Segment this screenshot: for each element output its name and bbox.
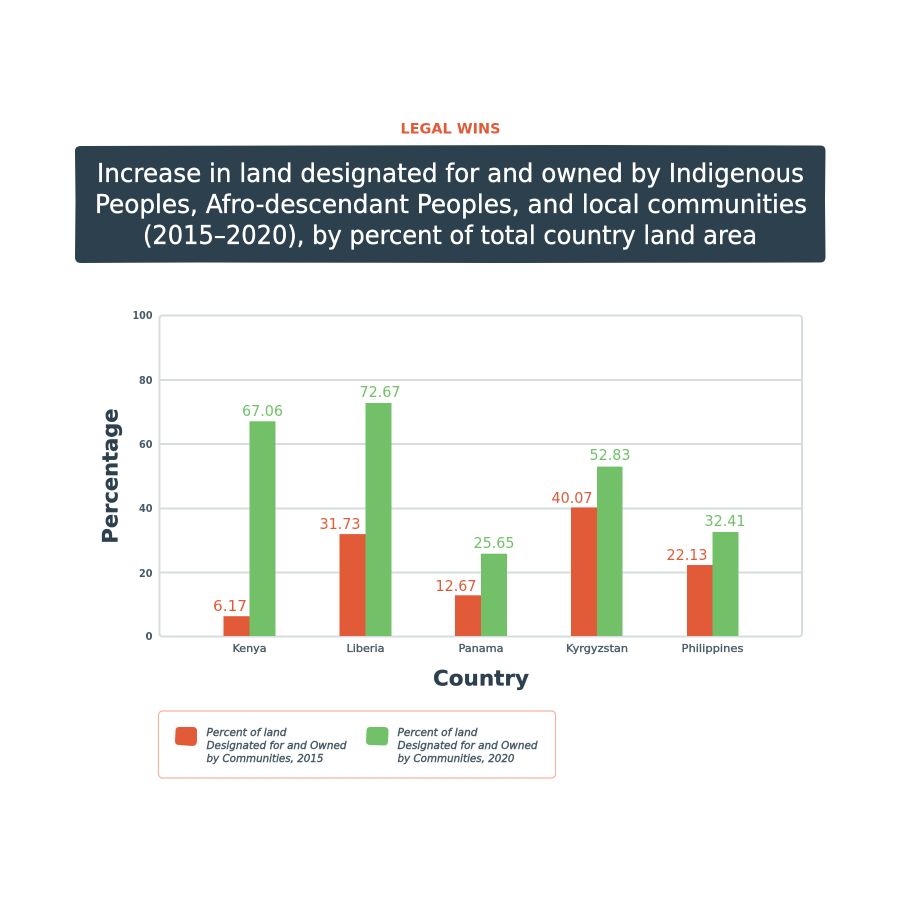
y axis tick labels: 40 bbox=[139, 502, 153, 515]
value labels: 2015: 40.07 bbox=[552, 489, 592, 507]
legend text: 2015 bbox=[206, 727, 347, 765]
eyebrow heading: LEGAL WINS bbox=[400, 122, 500, 138]
x axis labels: Philippines bbox=[682, 642, 744, 655]
x axis labels: Kyrgyzstan bbox=[566, 642, 628, 655]
legend text: 2020: Designated for and Owned bbox=[398, 740, 538, 752]
value labels: 2015 bbox=[213, 489, 708, 615]
x axis title: Country bbox=[433, 666, 529, 692]
y axis title: Percentage bbox=[98, 408, 124, 544]
x axis labels: Liberia bbox=[346, 642, 384, 655]
bars: 2020 bbox=[250, 403, 738, 636]
value labels: 2015: 6.17 bbox=[213, 597, 247, 615]
value labels: 2020: 25.65 bbox=[474, 534, 514, 552]
bars: 2015 bbox=[224, 507, 712, 636]
legend text: 2020: Percent of land bbox=[398, 727, 478, 739]
x axis labels: Kenya bbox=[232, 642, 266, 655]
value labels: 2020 bbox=[242, 383, 746, 552]
value labels: 2020: 72.67 bbox=[360, 383, 400, 401]
legend swatch: 2015 bbox=[175, 727, 197, 746]
title banner: (2015–2020), by percent of total country land area bbox=[143, 221, 757, 251]
legend text: 2015: Designated for and Owned bbox=[206, 740, 347, 752]
y axis tick labels bbox=[132, 309, 153, 643]
y axis tick labels: 0 bbox=[146, 630, 153, 643]
y axis tick labels: 20 bbox=[139, 567, 153, 580]
bar chart bbox=[98, 309, 802, 692]
title banner: Increase in land designated for and owned by Indigenous bbox=[97, 159, 804, 189]
legend text: 2020 bbox=[398, 727, 538, 765]
value labels: 2015: 22.13 bbox=[666, 546, 708, 564]
y axis tick labels: 80 bbox=[139, 374, 153, 387]
x axis labels bbox=[232, 642, 744, 655]
legend text: 2015: by Communities, 2015 bbox=[206, 753, 324, 765]
x axis labels: Panama bbox=[458, 642, 504, 655]
value labels: 2015: 31.73 bbox=[320, 515, 360, 533]
legend swatch: 2020 bbox=[366, 727, 388, 746]
plot frame and grid lines bbox=[160, 316, 802, 636]
y axis tick labels: 100 bbox=[132, 309, 153, 322]
legend bbox=[158, 711, 556, 778]
value labels: 2015: 12.67 bbox=[436, 577, 476, 595]
title banner bbox=[75, 145, 826, 263]
value labels: 2020: 52.83 bbox=[590, 446, 630, 464]
title banner: Peoples, Afro-descendant Peoples, and local communities bbox=[95, 190, 807, 220]
value labels: 2020: 32.41 bbox=[704, 512, 746, 530]
legend text: 2020: by Communities, 2020 bbox=[398, 753, 515, 765]
legend text: 2015: Percent of land bbox=[206, 727, 287, 739]
y axis tick labels: 60 bbox=[139, 438, 153, 451]
value labels: 2020: 67.06 bbox=[242, 402, 283, 420]
